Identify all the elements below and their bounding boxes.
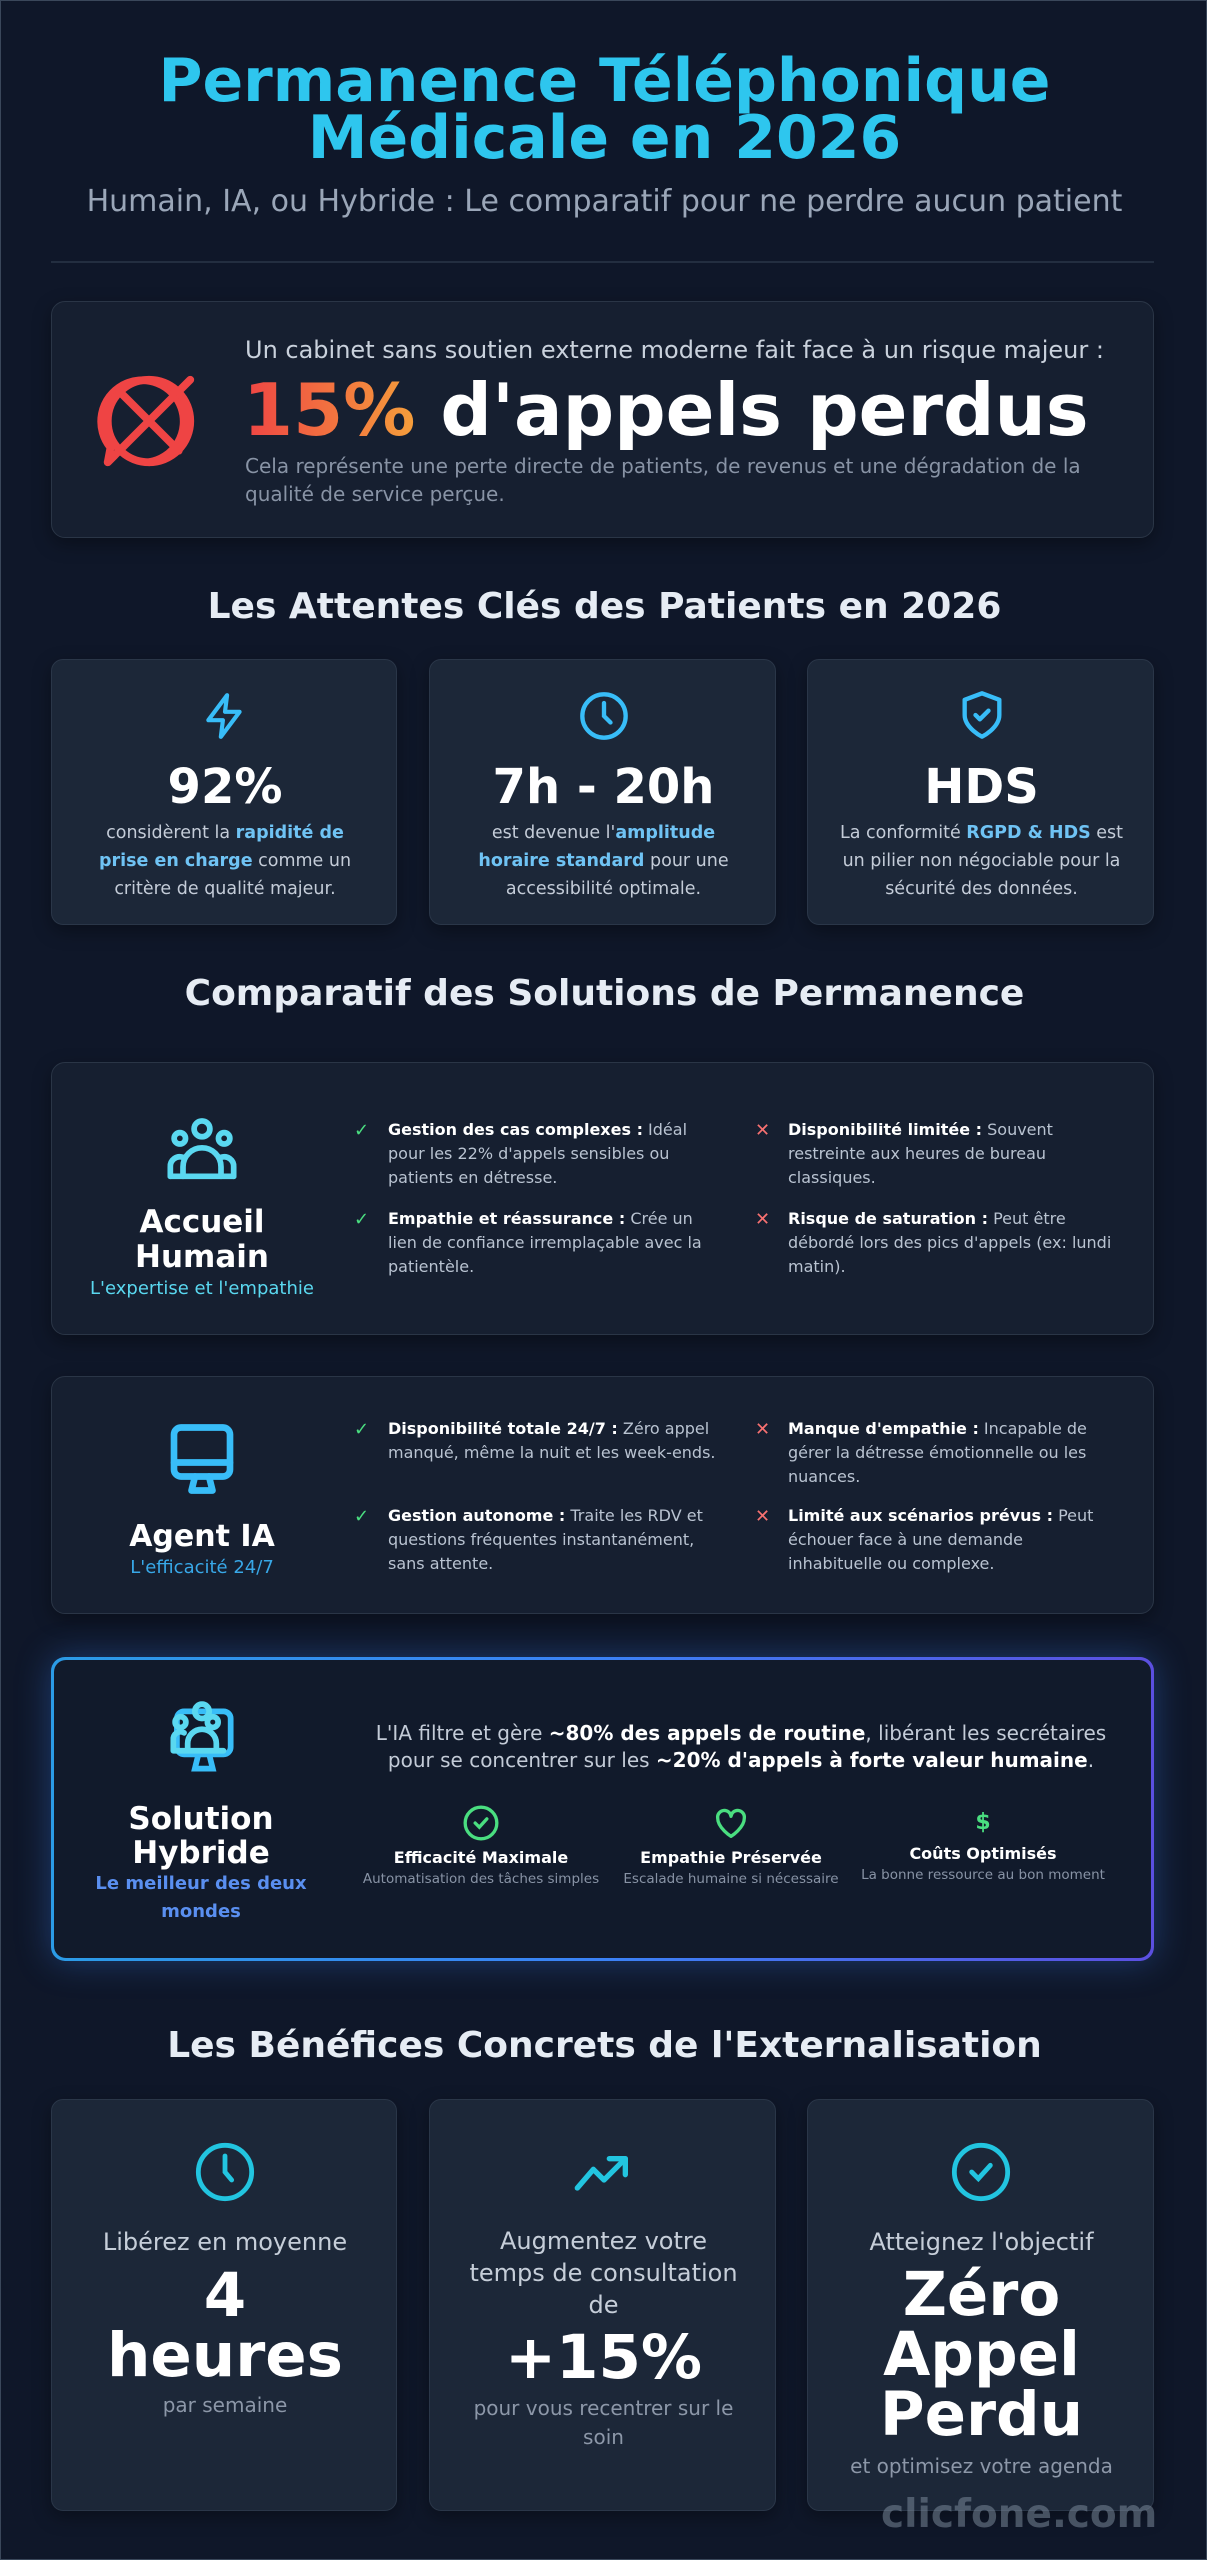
card: +15%: temps de consultation xyxy=(469,2259,738,2287)
panel: agent IA: Manque d'empathie : Incapable de xyxy=(788,1419,1087,1438)
text: alert description: qualité de service perçue. xyxy=(245,482,505,506)
panel: accueil humain: restreinte aux heures de bureau xyxy=(788,1144,1046,1163)
panel: agent IA: échouer face à une demande xyxy=(788,1530,1023,1549)
feature: empathie: Empathie Préservée xyxy=(640,1848,822,1867)
title: Accueil xyxy=(139,1204,265,1240)
panel: agent IA: gérer la détresse émotionnelle ou les xyxy=(788,1443,1086,1462)
panel: agent IA: Disponibilité totale 24/7 : Zéro appel xyxy=(388,1419,709,1438)
subtitle: Le meilleur des deux xyxy=(95,1873,307,1894)
icon: clock xyxy=(580,692,628,740)
title: Agent IA xyxy=(129,1519,275,1554)
card: zéro appel perdu: Atteignez l'objectif xyxy=(869,2228,1094,2256)
title: Hybride xyxy=(132,1835,270,1871)
description: horaire standard pour une xyxy=(478,851,729,871)
description: La conformité RGPD & HDS est xyxy=(840,823,1123,843)
con 2: ✕ xyxy=(755,1209,770,1230)
subtitle: Humain, IA, ou Hybride : Le comparatif pour ne perdre aucun patient xyxy=(87,184,1122,219)
card: +15%: de xyxy=(588,2291,618,2319)
icon: shield check xyxy=(962,691,1002,739)
card: 92% xyxy=(51,659,397,925)
card: 4 heures: par semaine xyxy=(163,2393,287,2417)
text: hybrid summary: L'IA filtre et gère ~80% des appels de routine, libérant les secrétaires xyxy=(376,1721,1106,1745)
value: HDS xyxy=(924,759,1039,815)
icon: clock xyxy=(196,2142,254,2202)
description xyxy=(99,823,351,899)
con 1: ✕ xyxy=(755,1419,770,1440)
text: alert intro: Un cabinet sans soutien externe moderne fait face à un risque majeur : xyxy=(245,336,1104,364)
panel: solution hybride xyxy=(51,1657,1154,1961)
subtitle: mondes xyxy=(161,1901,241,1922)
panel: agent IA: nuances. xyxy=(788,1467,860,1486)
title xyxy=(135,1204,269,1275)
subtitle: L'expertise et l'empathie xyxy=(90,1278,314,1299)
panel: agent IA: manqué, même la nuit et les week-ends. xyxy=(388,1443,716,1462)
title: Humain xyxy=(135,1239,269,1275)
pro 1: ✓ xyxy=(354,1120,369,1141)
watermark: clicfone.com xyxy=(881,2492,1157,2537)
pro 1: ✓ xyxy=(354,1419,369,1440)
feature: coûts: La bonne ressource au bon moment xyxy=(861,1867,1105,1883)
heading: bénéfices: Les Bénéfices Concrets de l'Externalisation xyxy=(167,2025,1042,2066)
pro 2: ✓ xyxy=(354,1209,369,1230)
card: +15%: soin xyxy=(583,2425,624,2449)
title: Médicale en 2026 xyxy=(308,103,901,173)
icon: lightning xyxy=(206,693,242,739)
con 2: ✕ xyxy=(755,1506,770,1527)
panel: accueil humain xyxy=(51,1062,1154,1335)
icon: trending up xyxy=(574,2156,628,2191)
card: zéro appel perdu: Appel xyxy=(883,2319,1080,2390)
panel: accueil humain: débordé lors des pics d'appels (ex: lundi xyxy=(788,1233,1111,1252)
panel: accueil humain: lien de confiance irremplaçable avec la xyxy=(388,1233,702,1252)
card: +15%: Augmentez votre xyxy=(500,2227,707,2255)
icon: users xyxy=(168,1118,236,1180)
card: zéro appel perdu: Zéro xyxy=(903,2259,1060,2330)
icon: monitor xyxy=(170,1424,234,1494)
card: 4 heures: 4 xyxy=(204,2260,246,2331)
panel: agent IA: inhabituelle ou complexe. xyxy=(788,1554,994,1573)
card: 4 heures: heures xyxy=(107,2320,343,2391)
panel: accueil humain: patientèle. xyxy=(388,1257,474,1276)
text: alert description xyxy=(245,454,1081,506)
description: sécurité des données. xyxy=(885,879,1078,899)
text: 15% d'appels perdus: 15% d'appels perdus xyxy=(243,368,1089,452)
panel: agent IA: questions fréquentes instantanément, xyxy=(388,1530,694,1549)
heading: attentes: Les Attentes Clés des Patients en 2026 xyxy=(208,586,1001,627)
icon: users on monitor xyxy=(170,1701,234,1772)
panel: accueil humain: Risque de saturation : Peut être xyxy=(788,1209,1066,1228)
panel: accueil humain: Gestion des cas complexes : Idéal xyxy=(388,1120,687,1139)
feature: empathie: Escalade humaine si nécessaire xyxy=(623,1871,839,1887)
feature: coûts: $ xyxy=(975,1810,991,1835)
panel: agent IA: Gestion autonome : Traite les RDV et xyxy=(388,1506,703,1525)
panel: agent IA: sans attente. xyxy=(388,1554,493,1573)
feature: empathie xyxy=(623,1808,839,1887)
description: accessibilité optimale. xyxy=(506,879,701,899)
panel: accueil humain: matin). xyxy=(788,1257,846,1276)
card: zéro appel perdu: et optimisez votre agenda xyxy=(850,2454,1113,2478)
panel: accueil humain: patients en détresse. xyxy=(388,1168,557,1187)
heading: comparatif: Comparatif des Solutions de Permanence xyxy=(185,973,1024,1014)
feature: efficacité: Efficacité Maximale xyxy=(394,1848,568,1867)
card: HDS xyxy=(807,659,1154,925)
card: 4 heures: Libérez en moyenne xyxy=(103,2228,347,2256)
feature: coûts xyxy=(861,1810,1105,1883)
pro 2: ✓ xyxy=(354,1506,369,1527)
icon: check circle xyxy=(952,2142,1010,2202)
panel: accueil humain: Disponibilité limitée : Souvent xyxy=(788,1120,1053,1139)
subtitle xyxy=(95,1873,307,1922)
title: Permanence Téléphonique xyxy=(158,46,1050,116)
card: +15%: +15% xyxy=(505,2322,702,2393)
title xyxy=(128,1801,274,1871)
panel: accueil humain: classiques. xyxy=(788,1168,876,1187)
value: 92% xyxy=(168,759,282,815)
card: 4 heures xyxy=(51,2099,397,2511)
card: +15% xyxy=(429,2099,776,2511)
card: +15%: pour vous recentrer sur le xyxy=(474,2396,733,2420)
description: prise en charge comme un xyxy=(99,851,351,871)
text: hybrid summary: pour se concentrer sur les ~20% d'appels à forte valeur humaine. xyxy=(388,1748,1094,1772)
panel: agent IA: Limité aux scénarios prévus : Peut xyxy=(788,1506,1093,1525)
con 1: ✕ xyxy=(755,1120,770,1141)
card: 7h-20h xyxy=(429,659,776,925)
subtitle: L'efficacité 24/7 xyxy=(130,1557,274,1578)
card: zéro appel perdu: Perdu xyxy=(880,2379,1083,2450)
panel: accueil humain: Empathie et réassurance : Crée un xyxy=(388,1209,693,1228)
title xyxy=(158,46,1050,173)
text: hybrid summary xyxy=(376,1721,1106,1772)
feature: efficacité: Automatisation des tâches simples xyxy=(363,1871,599,1887)
feature: efficacité xyxy=(363,1806,599,1887)
title: Solution xyxy=(128,1801,274,1837)
card: zéro appel perdu xyxy=(807,2099,1154,2511)
description: un pilier non négociable pour la xyxy=(843,851,1120,871)
text: alert description: Cela représente une perte directe de patients, de revenus et une dégradation de la xyxy=(245,454,1081,478)
value: 7h - 20h xyxy=(493,759,714,815)
description xyxy=(840,823,1123,899)
description: est devenue l'amplitude xyxy=(492,823,715,843)
feature: coûts: Coûts Optimisés xyxy=(909,1844,1057,1863)
description: considèrent la rapidité de xyxy=(106,823,344,843)
icon: phone off xyxy=(97,376,194,466)
description xyxy=(478,823,729,899)
panel: agent IA xyxy=(51,1376,1154,1614)
panel: alert 15% lost calls xyxy=(51,301,1154,538)
panel: accueil humain: pour les 22% d'appels sensibles ou xyxy=(388,1144,669,1163)
description: critère de qualité majeur. xyxy=(114,879,336,899)
